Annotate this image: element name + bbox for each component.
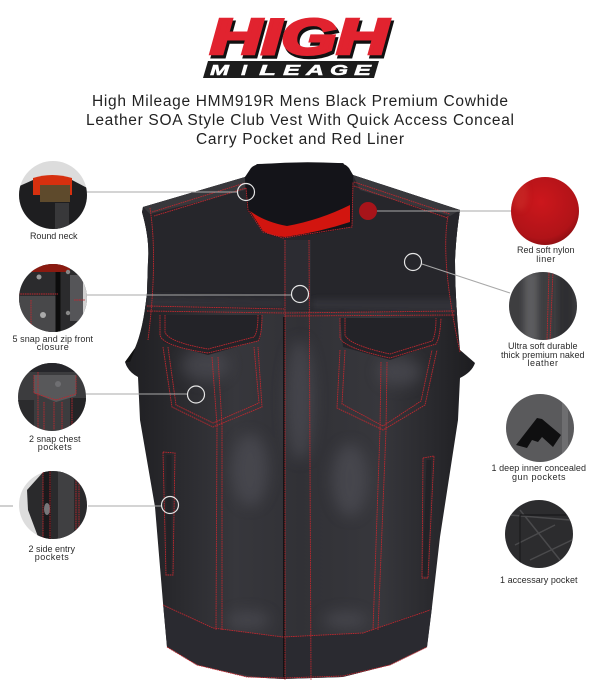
callout: concealed gun pocket [492, 392, 586, 482]
red liner [250, 205, 350, 237]
leader line [422, 264, 510, 293]
leader line [87, 294, 291, 296]
leather highlights [181, 340, 422, 628]
callout: chest pockets [15, 360, 204, 452]
yoke [142, 163, 460, 314]
placket [286, 296, 311, 310]
caption: Red soft nylon [517, 245, 575, 255]
marker [292, 286, 308, 302]
logo bar MILEAGE: L [259, 62, 276, 79]
logo bar MILEAGE: E [283, 62, 302, 79]
caption: 1 deep inner concealed [492, 463, 586, 473]
collar interior [245, 162, 353, 238]
callout: front closure [12, 260, 308, 352]
logo bar MILEAGE: I [241, 62, 248, 79]
logo wordmark HIGH [210, 9, 391, 68]
title [86, 93, 514, 148]
title: High Mileage HMM919R Mens Black Premium Cowhide [92, 93, 508, 110]
callout: side pockets [0, 468, 178, 562]
caption: 5 snap and zip front [12, 334, 94, 344]
thumbnail: side pocket [19, 471, 87, 539]
vest [120, 160, 480, 685]
placket opening [283, 317, 285, 679]
callout: premium leather [404, 254, 585, 368]
callout: round neck [15, 160, 254, 241]
marker [162, 496, 178, 514]
marker [188, 386, 204, 403]
logo: High Mileage [203, 9, 391, 79]
caption: 2 snap chest [29, 434, 81, 444]
logo wordmark HIGH: HIGH [210, 9, 389, 65]
icon: pistol [516, 418, 561, 448]
caption: thick premium naked [501, 350, 585, 360]
callout: red liner [359, 177, 579, 262]
stitching [147, 182, 460, 680]
leader line [87, 191, 238, 193]
vest body [120, 160, 480, 685]
logo bar MILEAGE: M [210, 62, 230, 79]
leader line [88, 505, 161, 507]
caption: 2 side entry [28, 544, 76, 554]
thumbnail: leather [509, 272, 577, 340]
callout: accessory pocket [500, 498, 578, 585]
side pocket slits [169, 455, 429, 576]
logo bar MILEAGE: G [330, 62, 349, 79]
caption: pockets [38, 442, 72, 452]
thumbnail: red nylon [511, 177, 579, 245]
title: Leather SOA Style Club Vest With Quick Access Conceal [86, 112, 514, 129]
caption: leather [527, 358, 559, 368]
caption: closure [37, 342, 69, 352]
caption: Ultra soft durable [508, 341, 578, 351]
logo wordmark HIGH: HIGH [212, 12, 391, 68]
caption: 1 accessary pocket [500, 575, 578, 585]
armhole shadows [125, 212, 148, 362]
caption: Round neck [30, 231, 78, 241]
thumbnail: snap and zip [19, 264, 87, 332]
marker [404, 254, 422, 270]
thumbnail: chest pocket [18, 363, 86, 431]
marker [238, 184, 254, 200]
hem band [163, 605, 432, 685]
left stub line [0, 505, 13, 507]
logo bar MILEAGE [203, 61, 379, 79]
caption: liner [536, 254, 556, 264]
chest pocket flaps [182, 315, 262, 355]
caption: pockets [35, 552, 69, 562]
logo bar MILEAGE: E [354, 62, 373, 79]
marker: red dot [359, 202, 377, 220]
thumbnail: gun pocket [506, 394, 574, 462]
logo bar MILEAGE: A [304, 62, 324, 79]
thumbnail: accessory pocket [505, 500, 573, 568]
caption: gun pockets [512, 472, 566, 482]
thumbnail: round neck [19, 161, 87, 229]
leader line [377, 210, 511, 212]
leader line [86, 393, 187, 395]
title: Carry Pocket and Red Liner [196, 131, 404, 148]
